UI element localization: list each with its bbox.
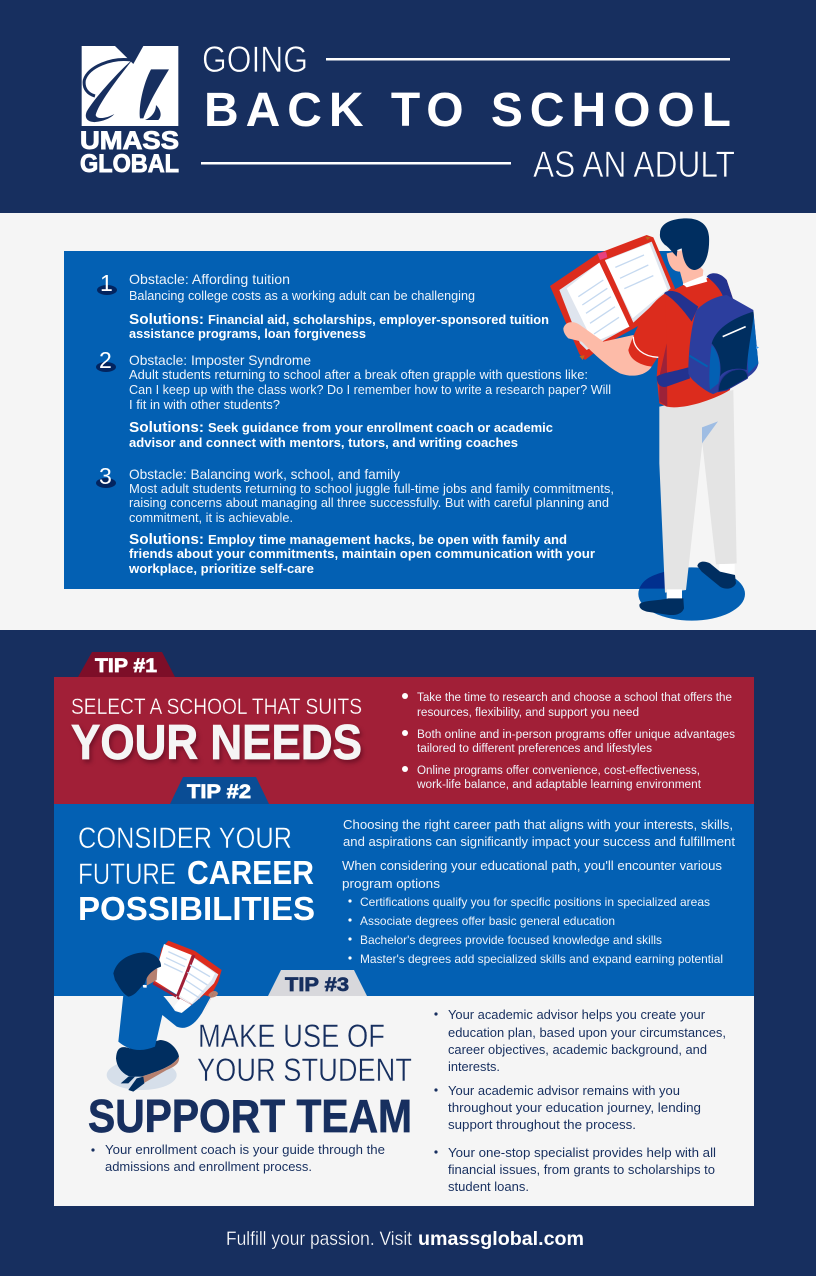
title: as an adult: AS AN ADULT [533, 144, 735, 185]
tip 2 tab [170, 777, 269, 804]
tip 3 right bullets: education plan, based upon your circumstances, [448, 1025, 726, 1040]
footer: umassglobal.com [418, 1229, 584, 1250]
tip 1 heading: YOUR NEEDS [71, 716, 362, 770]
tip 1 bullets [402, 692, 735, 791]
tip 3 right bullets: interests. [448, 1059, 500, 1074]
tip 3 right bullets: Your academic advisor helps you create your [448, 1007, 706, 1022]
obstacle 3: Most adult students returning to school juggle full-time jobs and family commitments, [129, 482, 614, 496]
obstacle 1: Solutions: [129, 311, 204, 328]
tip 3 right bullets: support throughout the process. [448, 1117, 636, 1132]
tip 3 left bullet: admissions and enrollment process. [105, 1159, 312, 1174]
tip 2 heading: FUTURE [78, 858, 176, 891]
obstacle 3: Obstacle: Balancing work, school, and family [129, 466, 400, 482]
tip 3 heading: YOUR STUDENT [197, 1052, 412, 1088]
panel: obstacles background [0, 213, 816, 630]
obstacle 2 [96, 347, 611, 450]
obstacle 3: friends about your commitments, maintain open communication with your [129, 547, 595, 561]
tip 1 bullets: Both online and in-person programs offer unique advantages [417, 729, 735, 741]
obstacle 2: advisor and connect with mentors, tutors, and writing coaches [129, 436, 518, 450]
tip 2 bullets: Bachelor's degrees provide focused knowledge and skills [360, 933, 662, 947]
panel: obstacles [64, 251, 683, 589]
tip 2 bullets: Certifications qualify you for specific positions in specialized areas [360, 895, 710, 909]
footer: Fulfill your passion. Visit [226, 1229, 413, 1250]
tip 3 tab: TIP #3 [285, 975, 349, 996]
tip 3 right bullets [434, 1007, 726, 1194]
tip 3 left bullet [91, 1142, 385, 1174]
obstacle 1: Financial aid, scholarships, employer-sponsored tuition [208, 313, 549, 327]
title: back to school: BACK TO SCHOOL [204, 84, 731, 137]
tip 2 heading: CAREER [187, 854, 314, 891]
tip 3 right bullets: financial issues, from grants to scholarships to [448, 1162, 715, 1177]
obstacle 2: Seek guidance from your enrollment coach or academic [208, 421, 553, 435]
tip 2 bullets [348, 895, 723, 966]
obstacle 2: Solutions: [129, 419, 204, 436]
tip 3 heading: MAKE USE OF [198, 1018, 385, 1054]
obstacle 3 [96, 463, 614, 576]
obstacle 2: 2 [99, 347, 112, 373]
obstacle 3: Employ time management hacks, be open with family and [208, 533, 567, 547]
obstacle 3: raising concerns about managing all three successfully. But with careful planning and [129, 496, 609, 510]
tip 2 bullets: Associate degrees offer basic general education [360, 914, 615, 928]
header [80, 39, 735, 185]
obstacle 3: commitment, it is achievable. [129, 511, 293, 525]
logo: UMass Global [80, 46, 179, 178]
tip 3 tab [268, 970, 367, 996]
tip 3 heading [88, 1018, 412, 1142]
footer [226, 1229, 584, 1250]
obstacle 3: Solutions: [129, 531, 204, 548]
tip 3 right bullets: throughout your education journey, lending [448, 1100, 701, 1115]
logo: UMass Global: UMASS [80, 127, 179, 155]
obstacle 2: I fit in with other students? [129, 398, 280, 412]
tip 3 heading: SUPPORT TEAM [88, 1090, 412, 1142]
tip 1 heading: SELECT A SCHOOL THAT SUITS [71, 694, 362, 719]
logo: UMass Global: GLOBAL [80, 150, 179, 178]
tip 1 bullets: resources, flexibility, and support you need [417, 707, 639, 719]
tip 2 intro text: and aspirations can significantly impact your success and fulfillment [343, 834, 735, 849]
illustration: seated woman reading a book [107, 941, 222, 1092]
tip 2 bullets: Master's degrees add specialized skills and expand earning potential [360, 952, 723, 966]
tip 3 left bullet: Your enrollment coach is your guide through the [105, 1142, 385, 1157]
tip 1 bullets: Take the time to research and choose a school that offers the [417, 692, 732, 704]
obstacle 3: 3 [99, 463, 112, 489]
tip 2 intro text: When considering your educational path, you'll encounter various [342, 858, 723, 873]
obstacle 2: Can I keep up with the class work? Do I remember how to write a research paper? Will [129, 383, 611, 397]
tip 2 panel [54, 777, 754, 996]
tip 1 heading [71, 694, 362, 770]
tip 1 bullets: tailored to different preferences and lifestyles [417, 743, 652, 755]
obstacle 2: Adult students returning to school after a break often grapple with questions like: [129, 368, 588, 382]
obstacle 2: Obstacle: Imposter Syndrome [129, 352, 311, 368]
tip 1 panel [54, 652, 754, 804]
obstacle 1: Balancing college costs as a working adult can be challenging [129, 289, 475, 303]
obstacle 1: 1 [100, 270, 113, 296]
tip 1 tab [78, 652, 175, 677]
tip 2 heading: CONSIDER YOUR [78, 822, 292, 855]
obstacle 1: assistance programs, loan forgiveness [129, 327, 366, 341]
title: going: GOING [202, 39, 308, 80]
tip 1 bullets: work-life balance, and adaptable learning environment [416, 779, 702, 791]
tip 2 tab: TIP #2 [187, 782, 251, 803]
tip 2 intro text: program options [342, 876, 441, 891]
tip 2 intro text [342, 817, 735, 891]
tip 2 heading [78, 822, 315, 927]
illustration: student with backpack reading a book [550, 218, 759, 621]
tip 3 right bullets: Your one-stop specialist provides help with all [448, 1145, 716, 1160]
tip 1 bullets: Online programs offer convenience, cost-effectiveness, [417, 765, 700, 777]
tip 2 heading: POSSIBILITIES [78, 890, 315, 927]
obstacle 1: Obstacle: Affording tuition [129, 271, 290, 287]
tip 3 right bullets: student loans. [448, 1179, 529, 1194]
obstacle 3: workplace, prioritize self-care [128, 562, 314, 576]
tip 3 right bullets: Your academic advisor remains with you [448, 1083, 680, 1098]
tip 1 tab: TIP #1 [95, 656, 157, 677]
tip 3 panel [54, 970, 754, 1206]
tip 3 right bullets: career objectives, academic background, and [448, 1042, 707, 1057]
obstacle 1 [97, 270, 549, 341]
tip 2 intro text: Choosing the right career path that aligns with your interests, skills, [343, 817, 733, 832]
